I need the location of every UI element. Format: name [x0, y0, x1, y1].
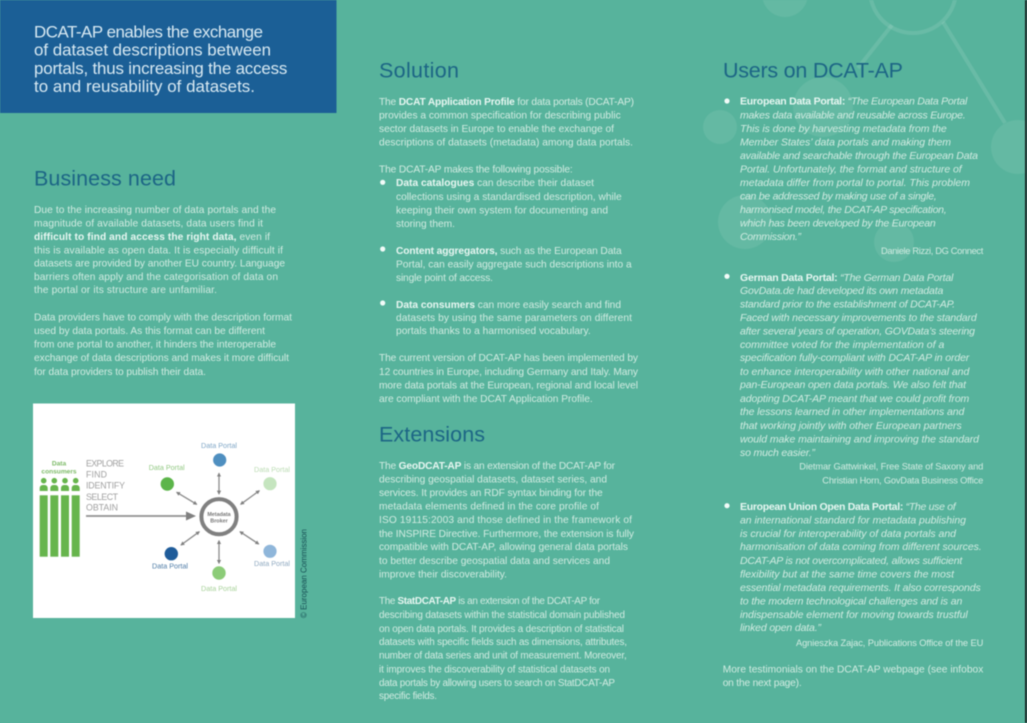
text block: GeoDCAT-AP [379, 461, 635, 580]
testimonial: German Data Portal [724, 272, 980, 459]
testimonial: European Union Open Data Portal: an international standard for metadata publishing [740, 514, 966, 526]
panel: lead statement: DCAT-AP enables the exchange [34, 22, 263, 41]
data portal nodes [149, 441, 290, 593]
testimonial: European Data Portal [724, 96, 978, 243]
action list: EXPLORE [86, 459, 124, 469]
data portal nodes: Data Portal [254, 559, 290, 568]
text block: GeoDCAT-AP: compatible with DCAT-AP, allowing general data portals [379, 542, 628, 553]
text block: business need: used by data portals. As this format can be different [34, 326, 265, 337]
text block: GeoDCAT-AP: The GeoDCAT-AP is an extension of the DCAT-AP for [379, 461, 616, 472]
text block: StatDCAT-AP: it improves the discoverability of statistical datasets on [379, 664, 610, 676]
testimonial: German Data Portal: adopting DCAT-AP meant that we could profit from [740, 393, 970, 405]
attribution: Agnieszka Zajac: Agnieszka Zajac, Publications Office of the EU [796, 638, 983, 648]
testimonial: European Data Portal: Portal. Unfortunately, the format and structure of [740, 164, 963, 176]
text block: GeoDCAT-AP: improve their discoverability. [379, 570, 507, 580]
testimonial: German Data Portal: that working jointly with other European partners [740, 420, 962, 432]
testimonial: European Data Portal: European Data Portal: “The European Data Portal [740, 96, 968, 108]
data consumers label: consumers [41, 468, 77, 476]
metadata broker: Broker [210, 518, 229, 524]
testimonial: European Data Portal: makes data available and reusable across Europe. [740, 110, 966, 122]
metadata broker [201, 499, 237, 534]
testimonial: European Data Portal: which has been developed by the European [740, 218, 936, 230]
text block: StatDCAT-AP: describing datasets within the statistical domain published [379, 610, 625, 621]
metadata broker: Metadata [207, 512, 232, 518]
list: data consumers: Data consumers can more easily search and find [396, 300, 621, 311]
text block: current version: 12 countries in Europe, including Germany and Italy. Many [379, 367, 639, 378]
testimonial: German Data Portal: after several years of operation, GOVData’s steering [740, 326, 975, 338]
attribution: Dietmar Gattwinkel and Christian Horn: Dietmar Gattwinkel, Free State of Saxony and [799, 462, 983, 472]
heading: extensions: Extensions [379, 423, 485, 447]
text block: business need: for data providers to publish their data. [34, 367, 206, 378]
testimonial: European Union Open Data Portal: is crucial for interoperability of data portals and [740, 528, 957, 540]
testimonial: German Data Portal: to enhance interoperability with other national and [740, 366, 970, 378]
list: data catalogues: collections using a standardised description, while [396, 192, 622, 203]
diagram background [33, 404, 295, 618]
panel: lead statement [0, 0, 336, 113]
text block: more testimonials: on the next page). [723, 678, 802, 689]
testimonial: German Data Portal: German Data Portal: “The German Data Portal [740, 272, 954, 284]
text block: business need: difficult to find and access the right data, even if [34, 232, 270, 243]
list: data catalogues: Data catalogues can describe their dataset [396, 178, 594, 189]
testimonial: German Data Portal: would make maintaining and improving the standard [740, 434, 980, 446]
text block: GeoDCAT-AP: metadata elements defined in the core profile of [379, 502, 599, 512]
list: data consumers: portals thanks to a harmonised vocabulary. [396, 326, 591, 337]
heading: business need: Business need [34, 167, 176, 191]
action list: IDENTIFY [86, 481, 125, 491]
list: content aggregators [380, 246, 632, 284]
list: content aggregators: Content aggregators, such as the European Data [396, 246, 622, 257]
text block: current version: are compliant with the DCAT Application Profile. [379, 394, 593, 405]
text block: solution: The DCAT Application Profile for data portals (DCAT-AP) [379, 97, 634, 108]
text block: business need: barriers often apply and the categorisation of data on [34, 272, 278, 283]
testimonial: European Union Open Data Portal: European Union Open Data Portal: “The use of [740, 501, 957, 513]
testimonial: European Union Open Data Portal: essential metadata requirements. It also corresponds [740, 582, 981, 594]
data consumers label: Data [52, 460, 66, 468]
text block: GeoDCAT-AP: services. It provides an RDF syntax binding for the [379, 488, 603, 499]
right edge strip [1025, 0, 1027, 723]
action list: FIND [86, 470, 107, 480]
text block: business need [34, 205, 292, 378]
text block: more testimonials: More testimonials on the DCAT-AP webpage (see infobox [723, 664, 983, 676]
text block: StatDCAT-AP: specific fields. [379, 691, 437, 702]
double arrows [177, 473, 259, 563]
icon: data consumers people and bars [40, 478, 80, 557]
list: data catalogues: keeping their own system for documenting and [396, 206, 608, 216]
text block: solution: The DCAT-AP makes the following possible: [379, 164, 573, 176]
text block: StatDCAT-AP: datasets with specific fields such as dimensions, attributes, [379, 637, 627, 648]
testimonial: German Data Portal: pan-European open data portals. We also felt that [739, 379, 967, 391]
testimonial: European Union Open Data Portal: harmonisation of data coming from different sources. [740, 541, 982, 553]
data portal nodes: Data Portal [152, 562, 188, 570]
text block: GeoDCAT-AP: ISO 19115:2003 and those defined in the framework of [379, 515, 632, 526]
list: content aggregators: Portal, can easily aggregate such descriptions into a [396, 260, 632, 270]
text block: GeoDCAT-AP: describing geospatial datasets, dataset series, and [379, 474, 607, 486]
chart: metadata broker diagram [33, 404, 295, 618]
data portal nodes: Data Portal [201, 441, 237, 450]
testimonial: German Data Portal: specification fully-compliant with DCAT-AP in order [740, 352, 970, 364]
text block: business need: from one portal to another, it hinders the interoperable [34, 340, 276, 350]
attribution: Dietmar Gattwinkel and Christian Horn [799, 462, 983, 486]
heading: solution: Solution [379, 59, 459, 83]
action list: OBTAIN [86, 503, 118, 513]
testimonial: European Data Portal: This is done by harvesting metadata from the [740, 123, 947, 135]
data consumers label [41, 460, 77, 476]
heading: users on DCAT-AP: Users on DCAT-AP [723, 59, 903, 83]
panel: lead statement: portals, thus increasing the access [34, 59, 287, 78]
text block: business need: Due to the increasing number of data portals and the [34, 205, 276, 216]
list: data consumers [380, 300, 632, 337]
text block: StatDCAT-AP [379, 596, 627, 702]
testimonial: European Union Open Data Portal [724, 501, 982, 634]
action list [86, 459, 125, 513]
data portal nodes: Data Portal [201, 584, 237, 593]
text block: business need: Data providers have to comply with the description format [34, 312, 292, 324]
text block: current version [379, 353, 639, 405]
testimonial: German Data Portal: Faced with necessary improvements to the standard [740, 312, 978, 324]
text block: business need: datasets are provided by another EU country. Language [34, 258, 285, 270]
testimonial: European Data Portal: Member States’ data portals and making them [740, 136, 951, 148]
text block: business need: magnitude of available datasets, data users find it [34, 218, 263, 230]
image credit: © European Commission [300, 529, 308, 618]
testimonial: German Data Portal: committee voted for the implementation of a [740, 339, 944, 351]
testimonial: European Data Portal: harmonised model, the DCAT-AP specification, [740, 204, 947, 216]
text block: StatDCAT-AP: The StatDCAT-AP is an extension of the DCAT-AP for [379, 596, 601, 607]
testimonial: European Union Open Data Portal: flexibility but at the same time covers the most [740, 568, 955, 580]
list: content aggregators: single point of access. [396, 273, 493, 284]
text block: GeoDCAT-AP: the INSPIRE Directive. Furthermore, the extension is fully [379, 529, 635, 540]
data portal nodes: Data Portal [149, 463, 185, 472]
testimonial: European Union Open Data Portal: linked open data.” [740, 622, 822, 634]
text block: solution [379, 97, 634, 176]
testimonial: European Union Open Data Portal: DCAT-AP is not overcomplicated, allows sufficient [740, 555, 963, 567]
text block: StatDCAT-AP: on open data portals. It provides a description of statistical [379, 624, 624, 635]
testimonial: European Data Portal: available and searchable through the European Data [740, 150, 978, 162]
testimonial: European Union Open Data Portal: indispensable element for moving towards trustful [740, 609, 968, 621]
arrow: consumers to broker [86, 512, 196, 520]
text block: solution: provides a common specification for describing public [379, 110, 621, 122]
testimonial: European Data Portal: Commission.” [740, 231, 802, 243]
text block: StatDCAT-AP: data portals by allowing users to search on StatDCAT-AP [379, 678, 615, 689]
panel: lead statement: of dataset descriptions between [34, 41, 271, 60]
text block: current version: The current version of DCAT-AP has been implemented by [379, 353, 639, 364]
testimonial: German Data Portal: so much easier.” [740, 447, 816, 459]
text block: more testimonials [723, 664, 983, 689]
attribution: Daniele Rizzi: Daniele Rizzi, DG Connect [881, 246, 984, 256]
list: data consumers: datasets by using the same parameters on different [396, 313, 632, 324]
list: data catalogues: storing them. [396, 219, 455, 230]
text block: solution: descriptions of datasets (metadata) among data portals. [379, 138, 633, 148]
text block: business need: the portal or its structure are unfamiliar. [34, 285, 217, 296]
text block: solution: sector datasets in Europe to enable the exchange of [379, 124, 614, 135]
testimonial: European Data Portal: metadata differ from portal to portal. This problem [740, 177, 970, 189]
testimonial: European Data Portal: can be addressed by making use of a single, [740, 190, 937, 202]
panel: lead statement: to and reusability of datasets. [34, 77, 255, 96]
text block: business need: exchange of data descriptions and makes it more difficult [34, 353, 289, 364]
text block: GeoDCAT-AP: to better describe geospatial data and services and [379, 556, 610, 567]
testimonial: German Data Portal: GovData.de had developed its own metadata [740, 285, 943, 297]
testimonial: German Data Portal: standard prior to the establishment of DCAT-AP. [740, 298, 955, 310]
attribution: Dietmar Gattwinkel and Christian Horn: Christian Horn, GovData Business Office [822, 476, 983, 486]
decorative network of circles [703, 0, 1027, 262]
text block: business need: this is available as open data. It is especially difficult if [34, 246, 283, 256]
list: data catalogues [380, 178, 622, 230]
action list: SELECT [86, 492, 119, 502]
testimonial: German Data Portal: the lessons learned in other implementations and [740, 406, 965, 418]
text block: StatDCAT-AP: number of data series and unit of measurement. Moreover, [379, 650, 627, 662]
data portal nodes: Data Portal [254, 465, 290, 474]
text block: current version: more data portals at the European, regional and local level [379, 380, 638, 392]
testimonial: European Union Open Data Portal: to the modern technological challenges and is an [740, 596, 962, 608]
